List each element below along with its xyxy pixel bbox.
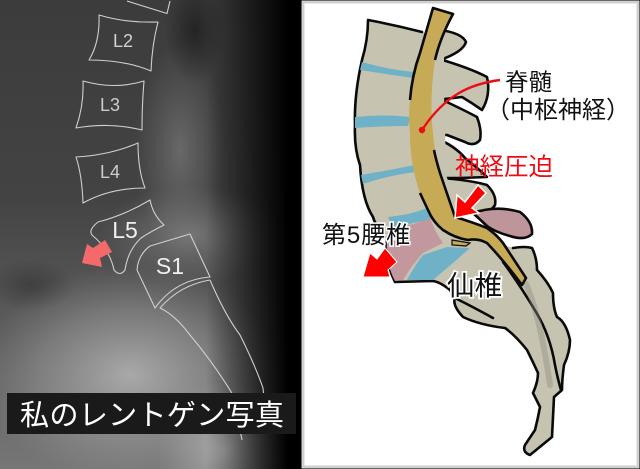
spinal cord: [409, 8, 526, 285]
L1 outline: [127, 1, 170, 14]
nerve root stub: [452, 240, 470, 246]
label: L3: L3: [100, 95, 120, 115]
caption: my x-ray: 私のレントゲン写真: [20, 399, 284, 432]
column outline: [355, 20, 570, 455]
arrow: slip direction on x-ray: [82, 240, 112, 267]
sacral inner lines: [455, 262, 561, 390]
L5 outline: [91, 200, 164, 274]
L3 outline: [76, 81, 144, 130]
sacrum outline: [160, 280, 265, 440]
label: sacrum: 仙椎: [447, 270, 502, 301]
S1 outline: [137, 234, 210, 308]
panel: spine illustration: [303, 2, 638, 467]
vertebral column and sacrum fill: [355, 20, 570, 455]
L5 spinous process: [473, 209, 532, 238]
L2 outline: [89, 15, 158, 71]
arrow: nerve compression: [455, 185, 486, 218]
label: L2: L2: [113, 31, 133, 51]
intervertebral discs: [355, 62, 470, 280]
label: spinal cord: 脊髄: [505, 69, 552, 95]
spinous processes: [436, 30, 495, 215]
label: central nerve: （中枢神経）: [486, 97, 630, 124]
panel: x-ray photograph: [0, 0, 303, 469]
spine illustration drawing: [355, 20, 570, 455]
arrow: L5 slip direction: [363, 248, 397, 277]
L4 outline: [76, 143, 145, 203]
vertebra outlines: [76, 1, 265, 440]
L5 vertebra (pink): [387, 218, 443, 281]
label: fifth lumbar vertebra: 第5腰椎: [322, 222, 410, 249]
label: S1: S1: [156, 253, 184, 279]
label: L5: L5: [112, 217, 138, 243]
label: L4: L4: [100, 162, 120, 182]
label: nerve compression: 神経圧迫: [455, 153, 553, 181]
pointer line to spinal cord: [419, 80, 500, 133]
